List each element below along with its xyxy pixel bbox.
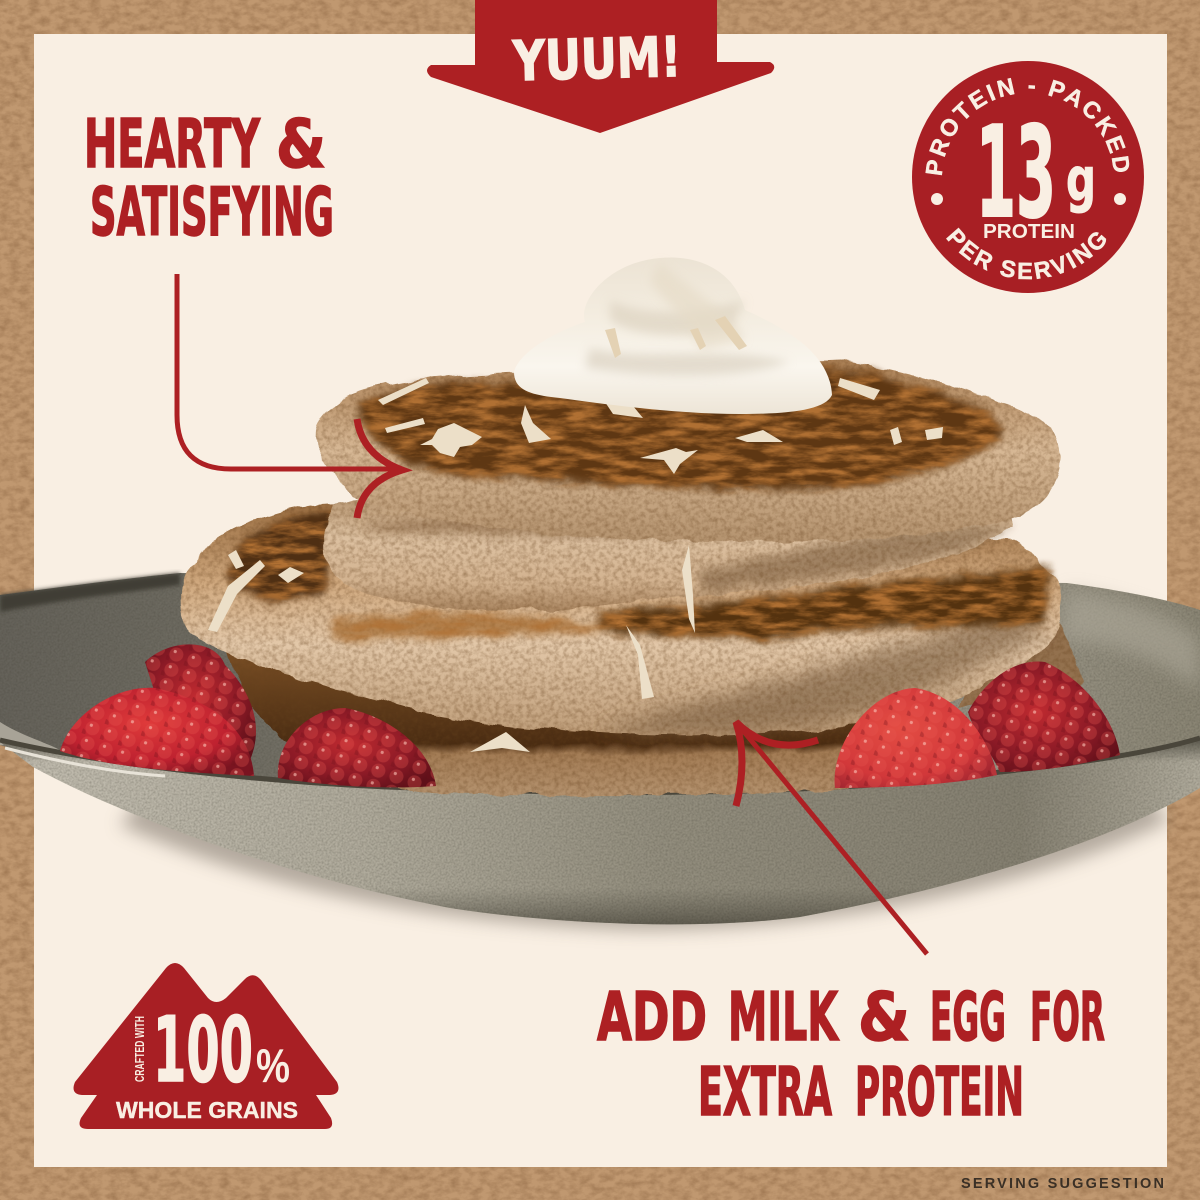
raspberry left front <box>60 688 254 776</box>
plate <box>0 573 1200 924</box>
13g value: g <box>1066 145 1096 215</box>
whole grains badge <box>74 963 338 1129</box>
arrow: to middle pancake <box>736 722 927 954</box>
13g value: 13 <box>976 99 1056 246</box>
top pancake seared surface <box>358 368 1003 489</box>
badge dots <box>931 193 1126 205</box>
heading: add milk & egg: ADD <box>597 978 707 1056</box>
heading: hearty & satisfying <box>84 105 334 251</box>
heading: add milk & egg <box>597 978 1105 1131</box>
heading: hearty & satisfying: SATISFYING <box>90 173 334 251</box>
lower part of top pancake <box>325 480 1012 610</box>
whole grains label: WHOLE GRAINS <box>116 1097 298 1123</box>
heading: add milk & egg: PROTEIN <box>855 1053 1024 1131</box>
whipped cream <box>514 257 832 414</box>
top pancake side <box>315 360 1060 542</box>
heading: add milk & egg: EGG <box>930 978 1006 1056</box>
bottom pancake <box>225 648 880 796</box>
heading: hearty & satisfying: & <box>276 105 326 183</box>
heading: add milk & egg: & <box>858 978 910 1056</box>
protein badge <box>912 61 1144 293</box>
coconut flakes <box>208 378 943 752</box>
100 value: 100 <box>153 998 253 1103</box>
raspberry centre left <box>278 708 436 787</box>
raspberry right back <box>968 662 1120 772</box>
arrow: to top pancake <box>177 274 402 518</box>
heading: hearty & satisfying: HEARTY <box>84 105 261 183</box>
13g value <box>976 99 1096 246</box>
raspberries <box>60 644 1120 788</box>
footnote: SERVING SUGGESTION <box>961 1176 1164 1192</box>
plate shadow <box>120 800 1170 930</box>
curved text: per serving: PER SERVING <box>946 228 1106 280</box>
curved text: protein-packed: PROTEIN - PACKED <box>925 78 1130 176</box>
raspberry right front <box>835 688 997 788</box>
photo: pancakes on plate <box>0 257 1200 930</box>
heading: add milk & egg: EXTRA <box>698 1053 832 1131</box>
protein label: PROTEIN <box>983 221 1075 243</box>
raspberry left back <box>145 644 256 760</box>
heading: add milk & egg: MILK <box>728 978 839 1056</box>
crafted with label: CRAFTED WITH <box>132 1016 147 1082</box>
percent sign: % <box>256 1039 290 1092</box>
infographic canvas: FOR <box>1030 978 1105 1056</box>
banner: YUUM! arrow: YUUM! <box>511 25 682 93</box>
middle pancake side <box>181 505 1063 735</box>
banner: YUUM! arrow <box>427 0 774 133</box>
right rear pancake <box>960 590 1085 705</box>
middle pancake seared patches <box>228 512 1050 640</box>
